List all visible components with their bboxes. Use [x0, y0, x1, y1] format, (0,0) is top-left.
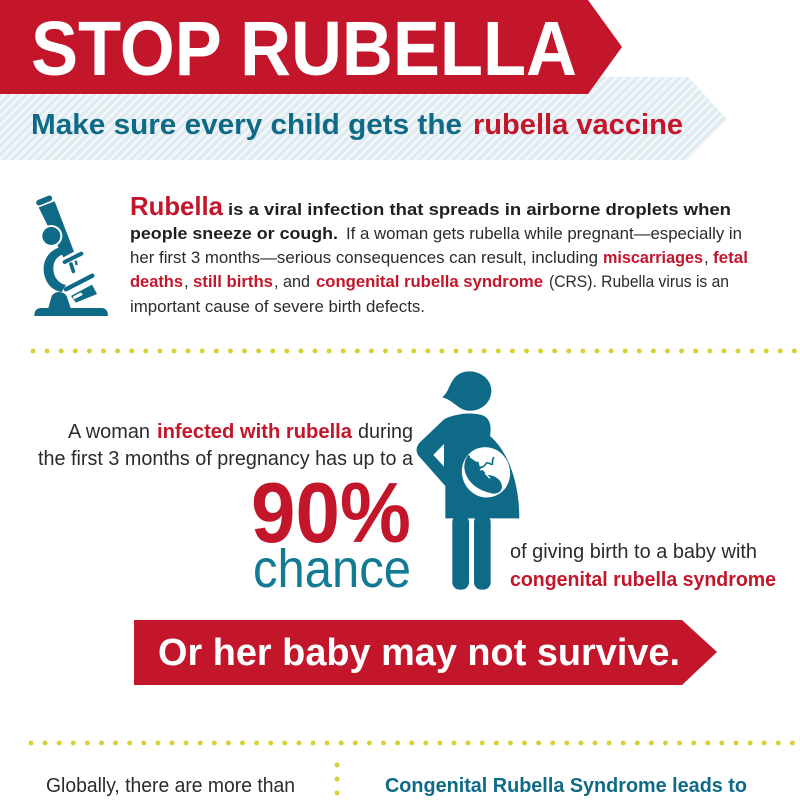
big number: 90% chance: 90%: [251, 466, 411, 561]
arrow callout: [134, 620, 717, 685]
intro text block: [130, 191, 748, 316]
subtitle text: Make sure every child gets the: [31, 109, 462, 141]
intro text block: ,: [184, 272, 189, 291]
statistic text right: [510, 540, 776, 591]
intro text block: (CRS). Rubella virus is an: [549, 272, 729, 291]
intro text block: , and: [274, 272, 310, 291]
statistic text left: during: [358, 420, 413, 443]
callout text: Or her baby may not survive.: [158, 632, 680, 674]
title banner: [0, 0, 622, 94]
statistic text left: the first 3 months of pregnancy has up to a: [38, 447, 414, 470]
intro text block: is a viral infection that spreads in airborne droplets when: [228, 201, 731, 219]
statistic text left: [38, 420, 414, 470]
intro text block: deaths: [130, 272, 183, 291]
intro text block: miscarriages: [603, 248, 703, 267]
big number: 90% chance: chance: [253, 539, 411, 599]
statistic text right: congenital rubella syndrome: [510, 569, 776, 591]
subtitle banner: [0, 77, 727, 160]
title: STOP RUBELLA: [31, 6, 577, 92]
big number: 90% chance: [251, 466, 411, 599]
heading word: Rubella: Rubella: [130, 191, 224, 221]
intro text block: important cause of severe birth defects.: [130, 297, 425, 316]
intro text block: her first 3 months—serious consequences can result, including: [130, 248, 598, 267]
bottom right heading: Congenital Rubella Syndrome leads to: [385, 775, 747, 797]
statistic text left: A woman: [68, 420, 150, 443]
icon: pregnant woman: [417, 371, 519, 590]
intro text block: fetal: [713, 248, 748, 267]
statistic text left: infected with rubella: [157, 421, 353, 443]
intro text block: ,: [704, 248, 709, 267]
icon: microscope: [34, 198, 108, 316]
intro text block: congenital rubella syndrome: [316, 272, 543, 291]
subtitle text: [31, 109, 683, 141]
statistic text right: of giving birth to a baby with: [510, 540, 757, 563]
intro text block: people sneeze or cough.: [130, 225, 338, 243]
intro text block: If a woman gets rubella while pregnant—especially in: [346, 224, 742, 243]
bottom left text: Globally, there are more than: [46, 775, 295, 797]
intro text block: still births: [193, 272, 273, 291]
subtitle text: rubella vaccine: [473, 109, 683, 141]
